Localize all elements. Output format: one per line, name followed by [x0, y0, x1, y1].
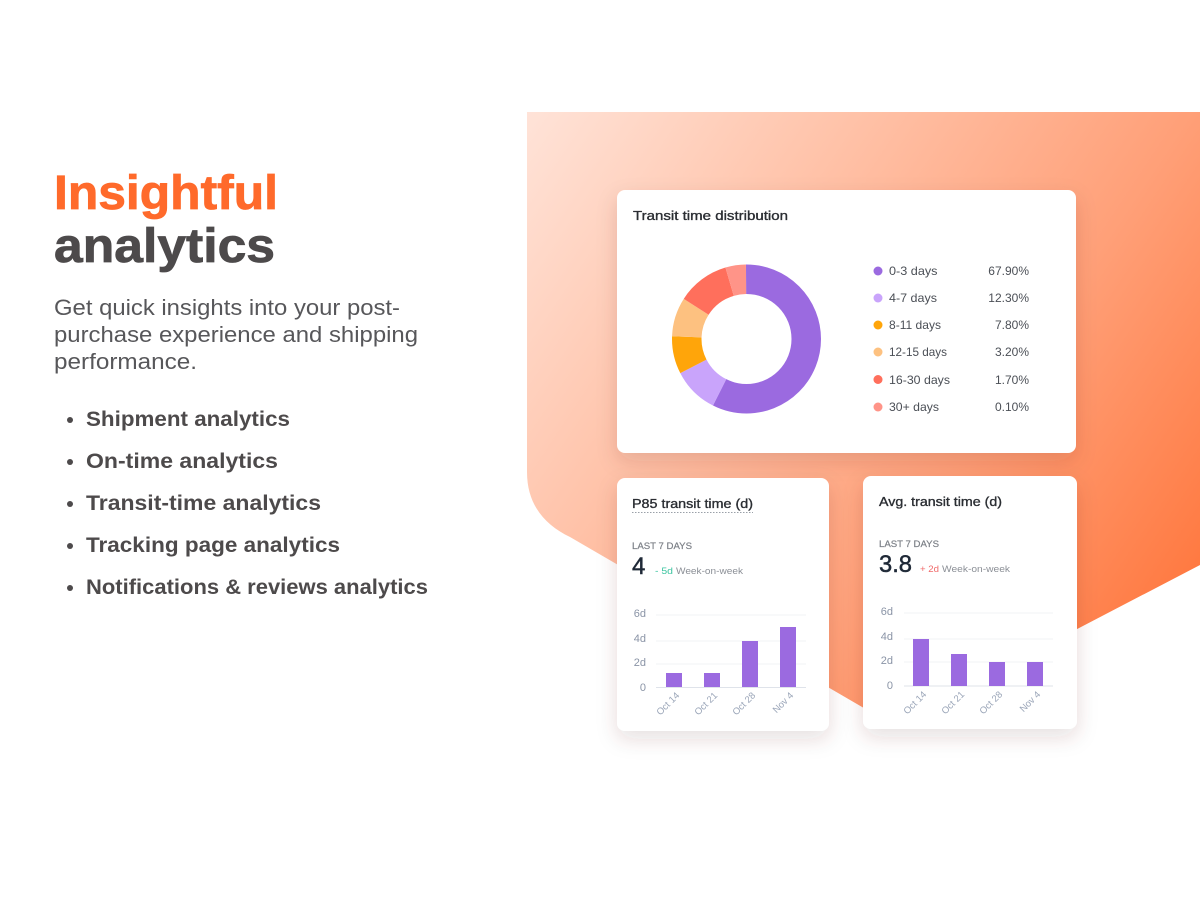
- title: [54, 167, 278, 273]
- feature list: On-time analytics: [86, 450, 278, 473]
- donut legend: 3.20%: [995, 345, 1029, 359]
- bar chart: P85 transit time: Nov 4: [771, 690, 796, 716]
- metric: last 7 days: Week-on-week: [942, 564, 1010, 575]
- bar chart: average transit time: [881, 606, 1053, 717]
- metric: last 7 days: 3.8: [879, 551, 912, 578]
- donut legend: 7.80%: [995, 318, 1029, 332]
- title: Insightful: [54, 167, 278, 220]
- donut legend: 0-3 days: [889, 264, 938, 278]
- donut legend: 16-30 days: [889, 373, 950, 387]
- feature list: Tracking page analytics: [86, 534, 340, 557]
- bar chart: average transit time: Oct 28: [978, 689, 1005, 717]
- bar chart: P85 transit time: [634, 608, 806, 718]
- feature list: Notifications & reviews analytics: [86, 576, 428, 599]
- bar chart: P85 transit time: 2d: [634, 657, 646, 669]
- metric: last 7 days: - 5d: [655, 566, 673, 577]
- bar chart: P85 transit time: 4d: [634, 633, 646, 645]
- metric: last 7 days: + 2d: [920, 564, 939, 575]
- bar chart: average transit time: Oct 14: [902, 689, 929, 717]
- donut legend: 8-11 days: [889, 318, 941, 332]
- donut legend: 1.70%: [995, 373, 1029, 387]
- donut legend: 30+ days: [889, 400, 939, 414]
- metric: last 7 days: 4: [632, 553, 645, 580]
- intro paragraph: [54, 295, 418, 374]
- bar chart: average transit time: 6d: [881, 606, 893, 618]
- panel: transit time distribution: [617, 190, 1076, 453]
- bar chart: P85 transit time: Oct 28: [731, 690, 758, 718]
- donut legend: 0.10%: [995, 400, 1029, 414]
- panel: P85 transit time: [617, 478, 829, 731]
- intro paragraph: Get quick insights into your post-: [54, 295, 400, 320]
- bar chart: P85 transit time: 6d: [634, 608, 646, 620]
- metric: last 7 days: [879, 539, 1010, 578]
- bar chart: average transit time: Oct 21: [940, 689, 967, 717]
- feature list: [67, 408, 428, 599]
- bar chart: average transit time: 2d: [881, 655, 893, 667]
- background gradient shape: [527, 112, 1200, 725]
- metric: last 7 days: [632, 541, 743, 580]
- donut chart: [687, 279, 806, 399]
- feature list: Transit-time analytics: [86, 492, 321, 515]
- intro paragraph: purchase experience and shipping: [54, 322, 418, 347]
- bar chart: average transit time: 0: [887, 680, 893, 692]
- intro paragraph: performance.: [54, 349, 197, 374]
- panel heading: P85 transit time: P85 transit time (d): [632, 496, 753, 511]
- donut legend: 67.90%: [988, 264, 1029, 278]
- bar chart: P85 transit time: 0: [640, 682, 646, 694]
- metric: last 7 days: LAST 7 DAYS: [632, 541, 692, 552]
- feature list: Shipment analytics: [86, 408, 290, 431]
- bar chart: P85 transit time: Oct 14: [655, 690, 682, 718]
- panel heading: transit time distribution: Transit time distribution: [633, 208, 788, 223]
- title: analytics: [54, 220, 275, 273]
- donut legend: 12.30%: [988, 291, 1029, 305]
- bar chart: P85 transit time: Oct 21: [693, 690, 720, 718]
- donut legend: 4-7 days: [889, 291, 937, 305]
- panel heading: average transit time: Avg. transit time (d): [879, 494, 1002, 509]
- donut legend: 12-15 days: [889, 345, 947, 359]
- metric: last 7 days: LAST 7 DAYS: [879, 539, 939, 550]
- bar chart: average transit time: Nov 4: [1018, 689, 1043, 715]
- panel: average transit time: [863, 476, 1077, 729]
- donut legend: [874, 264, 1029, 414]
- metric: last 7 days: Week-on-week: [676, 566, 743, 577]
- bar chart: average transit time: 4d: [881, 631, 893, 643]
